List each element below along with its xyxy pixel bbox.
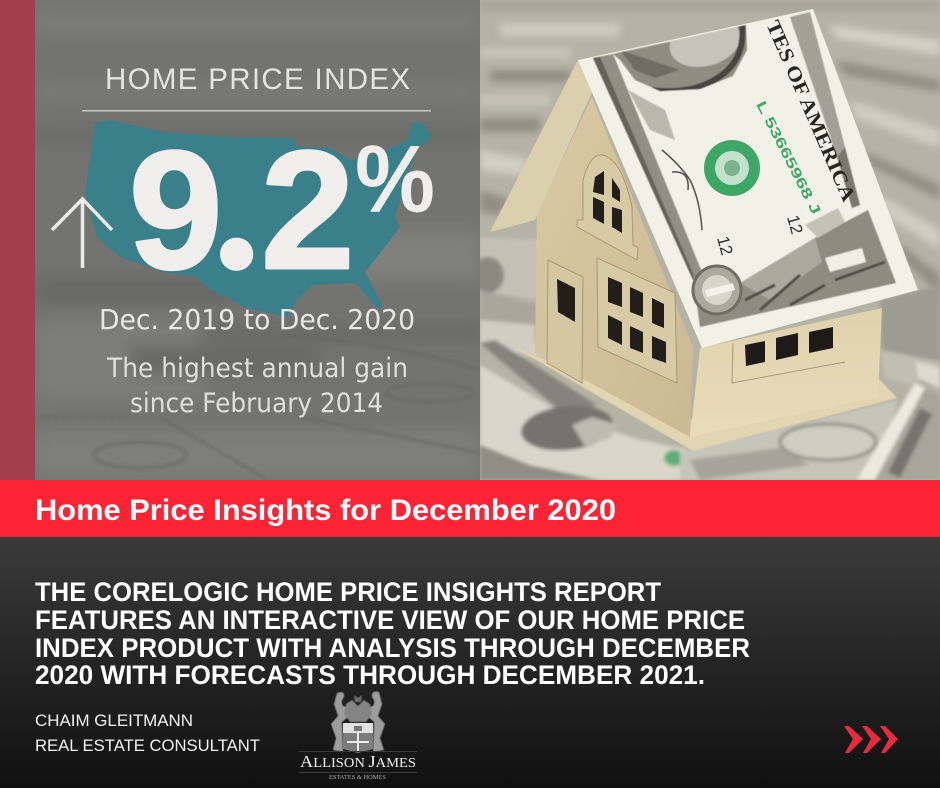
banner: [0, 480, 940, 537]
map: United States: [85, 120, 432, 317]
stat: 9.2 percent: [129, 86, 435, 313]
text: consultant name and title: [35, 712, 260, 755]
icon: up arrow: [52, 199, 112, 268]
red side strip: [0, 0, 35, 480]
logo: Allison James Estates and Homes: [299, 692, 417, 781]
arched window panes: [593, 171, 622, 233]
heading: home price index: HOME PRICE INDEX: [105, 63, 410, 96]
money background: [472, 0, 940, 480]
bill corner medallion: [693, 266, 741, 314]
text: highest annual gain: [106, 353, 408, 419]
house right wall: [692, 308, 882, 420]
right wall windows: [745, 327, 833, 366]
panel: report summary: [0, 537, 940, 788]
house base: [512, 346, 897, 451]
roof dollar bill: [578, 9, 918, 348]
bill signature: [662, 150, 702, 230]
text: consultant name and title: CHAIM GLEITMANN: [35, 712, 193, 730]
logo wordmark: ALLISON JAMES: [300, 752, 416, 771]
bill lettering: TES OF AMERICA: [761, 17, 860, 205]
door window: [557, 279, 575, 322]
text: report description: FEATURES AN INTERACTIVE VIEW OF OUR HOME PRICE: [35, 605, 745, 635]
icon: triple chevron arrows: [844, 726, 898, 753]
text: highest annual gain: The highest annual gain: [106, 353, 408, 384]
text: report description: INDEX PRODUCT WITH ANALYSIS THROUGH DECEMBER: [35, 633, 750, 663]
bill serial number: L 53665968 J: [753, 98, 824, 217]
right wall window frame: [732, 343, 845, 383]
text: highest annual gain: since February 2014: [130, 388, 383, 419]
photo: model house on dollar bills: [472, 0, 940, 480]
stat: 9.2 percent: .: [211, 86, 262, 313]
bill lower engraving band: [693, 210, 896, 327]
right bills: [880, 285, 940, 362]
bill seal: [704, 140, 760, 196]
bill left engraving band: [593, 54, 702, 280]
stat: 9.2 percent: %: [355, 126, 435, 233]
text: date range: Dec. 2019 to Dec. 2020: [99, 303, 415, 336]
rule under heading: [82, 110, 431, 112]
roof left side: [490, 60, 593, 232]
bill denomination marks: 12: [783, 213, 806, 236]
stat: 9.2 percent: 2: [261, 116, 354, 304]
text: report description: [35, 577, 750, 690]
text: report description: THE CORELOGIC HOME PRICE INSIGHTS REPORT: [35, 577, 661, 607]
left bills: [480, 237, 540, 300]
stat: 9.2 percent: 9: [129, 116, 222, 304]
bill portrait: [613, 24, 748, 92]
house left wall: [535, 97, 693, 437]
bill denomination marks: 12: [713, 234, 736, 257]
logo tagline: ESTATES & HOMES: [329, 774, 386, 781]
panel: home price index: [35, 0, 480, 480]
portrait bill: [519, 406, 614, 452]
arched window frame: [577, 155, 638, 260]
banner title: Home Price Insights for December 2020: [35, 494, 616, 527]
door: [547, 260, 583, 383]
bill denomination marks: [717, 216, 802, 256]
bill right engraving band: [790, 12, 845, 157]
logo crest scrolls: [331, 692, 385, 752]
six window panes: [608, 277, 666, 363]
logo rules: [299, 751, 417, 752]
text: report description: 2020 WITH FORECASTS THROUGH DECEMBER 2021.: [35, 660, 705, 690]
logo shield: [343, 723, 373, 753]
text: consultant name and title: REAL ESTATE CONSULTANT: [35, 737, 260, 755]
six-pane window frame: [597, 258, 677, 383]
